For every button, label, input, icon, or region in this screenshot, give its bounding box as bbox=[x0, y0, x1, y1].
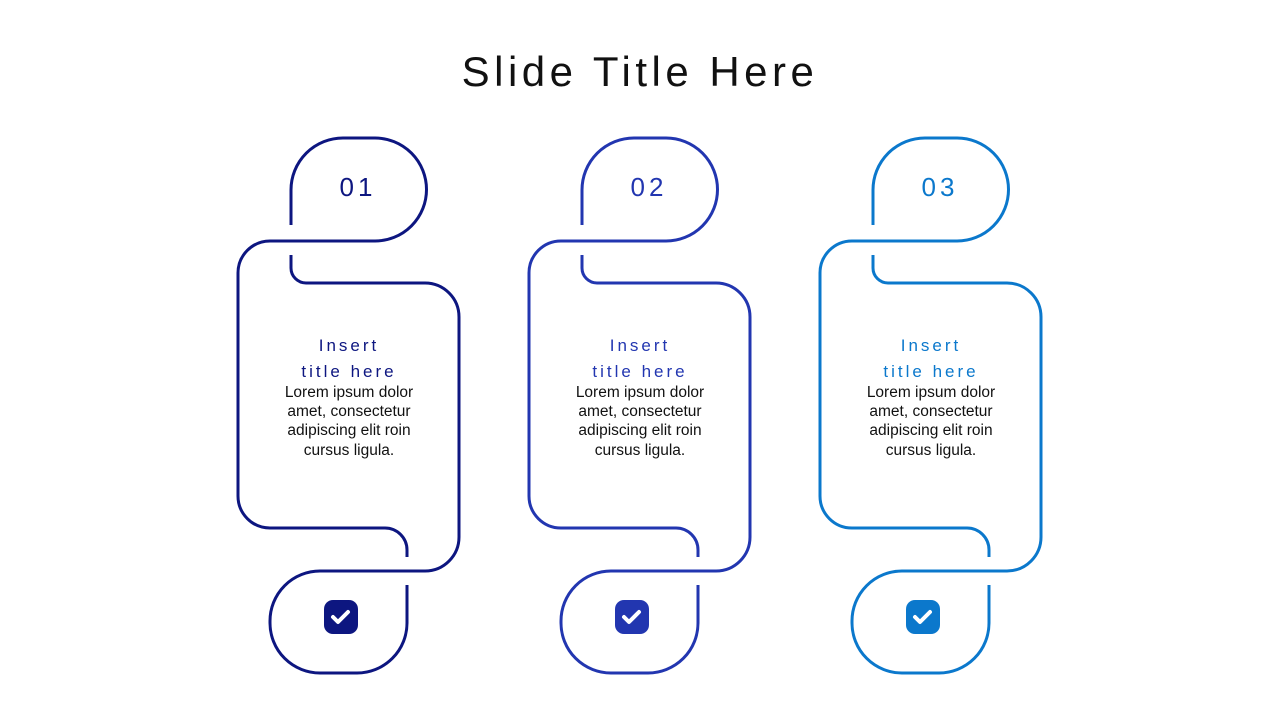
number 01: 01 bbox=[340, 172, 376, 202]
body text 01 bbox=[285, 384, 413, 459]
body text 03: adipiscing elit roin bbox=[869, 422, 993, 439]
heading 02: Insert bbox=[610, 336, 670, 355]
body text 02: adipiscing elit roin bbox=[578, 422, 702, 439]
heading 01: Insert bbox=[319, 336, 379, 355]
panel: step 02 bbox=[529, 138, 750, 673]
body text 02: Lorem ipsum dolor bbox=[576, 384, 704, 401]
body text 03 bbox=[867, 384, 995, 459]
heading 03: Insert bbox=[901, 336, 961, 355]
body text 02: amet, consectetur bbox=[578, 403, 702, 420]
body text 01: amet, consectetur bbox=[287, 403, 411, 420]
body text 02: cursus ligula. bbox=[595, 442, 685, 459]
body text 03: Lorem ipsum dolor bbox=[867, 384, 995, 401]
number 03: 03 bbox=[922, 172, 958, 202]
body text 01: adipiscing elit roin bbox=[287, 422, 411, 439]
body text 03: amet, consectetur bbox=[869, 403, 993, 420]
icon: check 01 bbox=[324, 600, 358, 634]
body text 01: Lorem ipsum dolor bbox=[285, 384, 413, 401]
icon: check 02 bbox=[615, 600, 649, 634]
panel: step 03 bbox=[820, 138, 1041, 673]
body text 03: cursus ligula. bbox=[886, 442, 976, 459]
panel: step 01 bbox=[238, 138, 459, 673]
title: Slide Title Here bbox=[462, 48, 818, 95]
body text 01: cursus ligula. bbox=[304, 442, 394, 459]
icon: check 03 bbox=[906, 600, 940, 634]
body text 02 bbox=[576, 384, 704, 459]
panel: step 01: title here bbox=[301, 362, 397, 381]
panel: step 03: title here bbox=[883, 362, 979, 381]
number 02: 02 bbox=[631, 172, 667, 202]
panel: step 02: title here bbox=[592, 362, 688, 381]
